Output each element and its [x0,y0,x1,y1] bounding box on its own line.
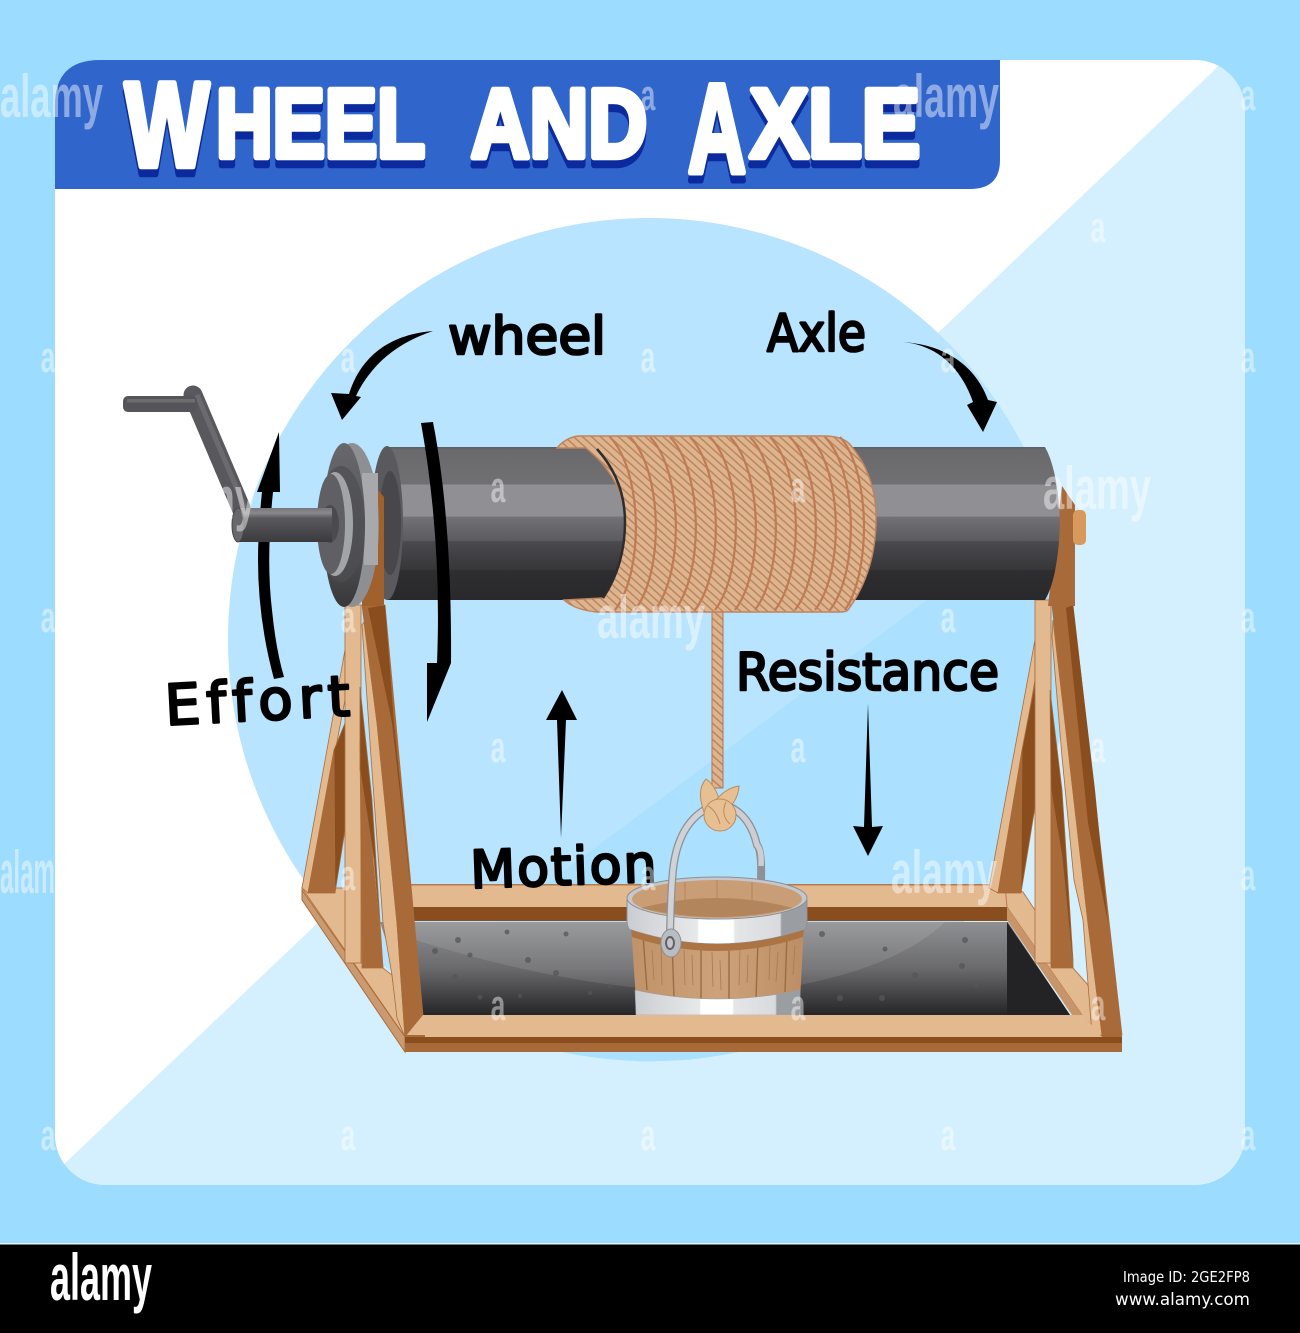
rope wound on axle [557,436,876,612]
hand wheel [232,443,379,607]
label: Resistance: Resistance [736,643,999,703]
watermarks: a [1241,332,1256,382]
watermarks: a [341,332,356,382]
background circle [228,218,1071,1061]
watermarks: a [41,332,56,382]
label: Wheel: wheel [448,307,606,367]
watermarks: alamy [893,63,999,130]
arrow: resistance down [853,703,883,856]
watermarks: a [491,202,506,252]
wooden frame side beams [302,885,1102,1052]
footer logo: alamy [50,1240,152,1314]
wooden frame legs: right [989,600,1122,1035]
watermarks: a [491,980,506,1030]
watermarks: a [341,1110,356,1160]
crank handle [123,395,245,508]
watermarks: a [791,202,806,252]
watermarks: alamy [148,465,256,532]
axle cylinder [362,446,1086,606]
title text shadow [125,66,920,207]
rope knot [700,779,739,831]
watermarks: a [1241,1110,1256,1160]
title text shadow: AND [471,77,647,186]
hanging rope [712,608,723,788]
title: A [688,58,746,199]
bucket handle back [728,806,761,880]
label: Axle: Axle [767,304,866,364]
wooden frame legs: left [302,605,425,1037]
arrow: rotation down [421,422,451,722]
watermarks: alamy [891,839,997,906]
watermarks: a [491,462,506,512]
bucket handle front [670,809,706,935]
arrow: motion up [546,690,577,838]
watermarks: a [641,1110,656,1160]
watermarks: alamy [1043,455,1151,522]
back leg [989,640,1035,893]
watermarks: alamy [0,63,103,130]
watermarks: a [791,722,806,772]
label: Effort: Effort [163,664,351,739]
front leg [362,605,425,1037]
title: W [125,58,210,192]
watermarks: a [41,592,56,642]
title text shadow: HEEL [216,77,425,186]
watermarks: a [791,462,806,512]
arrow: to wheel [331,331,433,420]
watermarks: a [341,850,356,900]
middle leg [1050,690,1073,968]
watermarks: a [191,722,206,772]
watermarks: a [1091,202,1106,252]
watermarks: a [641,332,656,382]
watermarks: a [191,462,206,512]
post [1035,600,1051,963]
panel: split white and pale blue card [55,60,1245,1185]
watermarks: a [941,592,956,642]
bucket handle lug [661,929,681,957]
title: HEEL [216,69,425,178]
footer image id: Image ID: 2GE2FP8 [1123,1268,1250,1286]
watermarks: a [941,332,956,382]
label: Motion: Motion [469,835,657,901]
footer url: www.alamy.com [1115,1290,1250,1310]
bucket rim band [627,900,807,944]
wooden frame back beam [400,884,1008,921]
effort arrow [257,432,284,679]
watermarks: a [641,70,656,120]
back leg [302,650,345,893]
watermarks: a [41,1110,56,1160]
wooden bucket [627,806,807,1015]
post [345,605,361,963]
watermarks: a [941,1110,956,1160]
watermarks: a [1241,70,1256,120]
title text shadow: W [125,66,210,200]
watermarks: a [191,980,206,1030]
watermarks: a [341,592,356,642]
watermarks: alamy [597,584,705,651]
title banner [55,60,1000,207]
watermarks [0,63,1256,1160]
watermarks: a [191,202,206,252]
middle leg [360,687,383,968]
front leg [1052,605,1122,1035]
watermarks: a [1241,850,1256,900]
title: AND [471,69,647,178]
bucket bottom band [635,990,800,1015]
footer bar [0,1240,1300,1333]
watermarks: a [491,722,506,772]
title [125,58,920,199]
watermarks: a [1091,722,1106,772]
watermarks: alam [0,839,55,906]
well pit [380,922,1070,1015]
watermarks: a [1241,592,1256,642]
title text shadow: XLE [750,77,920,186]
watermarks: a [1091,980,1106,1030]
watermarks: a [791,980,806,1030]
arrow: to axle [903,342,997,432]
title text shadow: A [688,66,746,207]
watermarks: a [641,850,656,900]
front beam [405,1015,1122,1052]
title: XLE [750,69,920,178]
